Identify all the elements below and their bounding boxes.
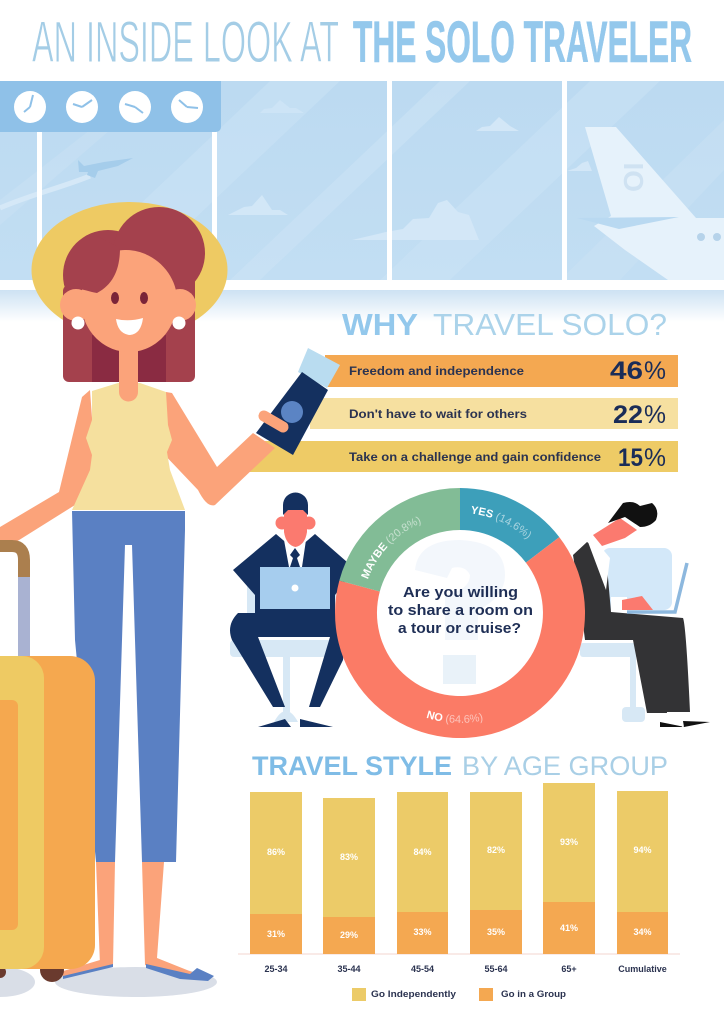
bar group cumulative <box>617 791 668 974</box>
clock panel <box>0 81 221 132</box>
bar group 45-54 <box>397 792 448 974</box>
face <box>60 235 196 352</box>
bar group 35-44: 83% <box>340 852 358 862</box>
man with laptop, right <box>573 502 710 727</box>
head and hair <box>593 502 657 546</box>
bar group 25-34 <box>250 792 302 974</box>
contrail <box>0 176 90 208</box>
bar: freedom and independence <box>325 355 678 387</box>
bar group 35-44: 35-44 <box>337 964 361 974</box>
cloud <box>260 100 304 113</box>
trousers <box>230 613 345 707</box>
bar group 35-44: 29% <box>340 930 358 940</box>
label: yes: YES (14.6%) <box>472 506 531 540</box>
shirt and tie <box>284 540 306 567</box>
legs and shoes <box>60 862 214 981</box>
bar chart: travel style by age <box>238 783 680 974</box>
donut question <box>388 584 533 637</box>
laptop <box>627 563 687 612</box>
axis <box>238 953 680 955</box>
segment: yes <box>460 488 559 563</box>
bar group 55-64: 35% <box>487 927 505 937</box>
bench <box>580 548 672 722</box>
bar group 55-64: 82% <box>487 845 505 855</box>
suit <box>573 542 690 713</box>
distant plane <box>78 158 133 178</box>
airplane tail: OI <box>618 162 649 192</box>
clock <box>14 91 46 123</box>
bar: freedom and independence: Freedom and independence <box>349 364 524 378</box>
airport window scene <box>0 81 724 280</box>
legend <box>352 988 567 1001</box>
bar group 55-64 <box>470 792 522 974</box>
bar: don't have to wait: 22 <box>613 401 643 429</box>
sun hat <box>32 202 228 338</box>
clock <box>119 91 151 123</box>
bar group 65+: 93% <box>560 837 578 847</box>
bar: freedom and independence: 46 <box>610 357 643 385</box>
suit jacket <box>233 534 347 616</box>
cloud <box>228 195 288 215</box>
neck overlap <box>119 375 138 402</box>
bar group 65+ <box>543 783 595 974</box>
clock <box>66 91 98 123</box>
shoes <box>258 719 333 727</box>
title: AN INSIDE LOOK AT <box>32 10 339 75</box>
heading: travel style by age group: TRAVEL STYLE <box>252 751 452 781</box>
hair <box>63 207 205 382</box>
bar group 25-34: 86% <box>267 847 285 857</box>
laptop <box>260 567 330 609</box>
sleeveless top <box>72 383 185 510</box>
bar group cumulative: 34% <box>633 927 652 937</box>
bar group 45-54: 84% <box>413 847 432 857</box>
bar group 25-34: 31% <box>267 929 285 939</box>
donut question: to share a room on <box>388 602 533 619</box>
left arm <box>0 390 95 552</box>
bar group 45-54: 33% <box>413 927 432 937</box>
cloud <box>567 161 592 171</box>
window sill and floor glow <box>0 280 724 322</box>
suitcase <box>0 546 95 982</box>
head <box>276 492 316 547</box>
bar group cumulative: 94% <box>633 845 652 855</box>
bench <box>230 585 342 722</box>
passport and ticket <box>256 348 340 455</box>
cloud <box>476 117 519 131</box>
segment: no <box>335 537 585 738</box>
heading: travel style by age group <box>252 751 668 781</box>
donut question: a tour or cruise? <box>398 620 521 637</box>
shadow <box>0 967 217 997</box>
bar: don't have to wait <box>310 398 678 429</box>
shoes <box>660 712 710 727</box>
segment: maybe <box>339 488 460 592</box>
bar: don't have to wait: Don't have to wait for others <box>349 407 527 421</box>
heading: why travel solo: TRAVEL SOLO? <box>433 307 667 342</box>
bar: freedom and independence: % <box>644 357 666 385</box>
label: no: NO (64.6%) <box>426 710 482 724</box>
man with laptop, left <box>230 492 347 727</box>
panel: reasons for solo travel <box>245 355 678 472</box>
heading: travel style by age group: BY AGE GROUP <box>462 751 668 781</box>
right arm <box>160 392 275 505</box>
woman traveler <box>0 202 340 997</box>
bar group 55-64: 55-64 <box>484 964 508 974</box>
bar: don't have to wait: % <box>644 401 666 429</box>
bar group 45-54: 45-54 <box>411 964 434 974</box>
bar group 65+: 65+ <box>561 964 577 974</box>
bar group 25-34: 25-34 <box>264 964 288 974</box>
clock <box>171 91 203 123</box>
bar: take on a challenge: Take on a challenge and gain confidence <box>349 450 601 464</box>
bar group 65+: 41% <box>560 923 578 933</box>
bar: take on a challenge: 15 <box>618 444 643 472</box>
donut question: Are you willing <box>403 584 518 601</box>
bar group cumulative: Cumulative <box>618 964 667 974</box>
trousers <box>72 511 185 862</box>
bar: take on a challenge: % <box>644 444 666 472</box>
airplane tail <box>577 127 724 280</box>
faint question mark <box>415 540 505 684</box>
bar group 35-44 <box>323 798 375 974</box>
shirt and hands <box>588 540 653 612</box>
legend: Go in a Group <box>501 989 567 999</box>
label: maybe: MAYBE (20.8%) <box>361 516 421 579</box>
cloud <box>352 200 479 240</box>
donut chart: share a room <box>335 488 585 738</box>
neck <box>119 340 138 402</box>
bar: take on a challenge <box>245 441 678 472</box>
legend: Go Independently <box>371 989 456 999</box>
heading: why travel solo: WHY <box>342 307 418 342</box>
